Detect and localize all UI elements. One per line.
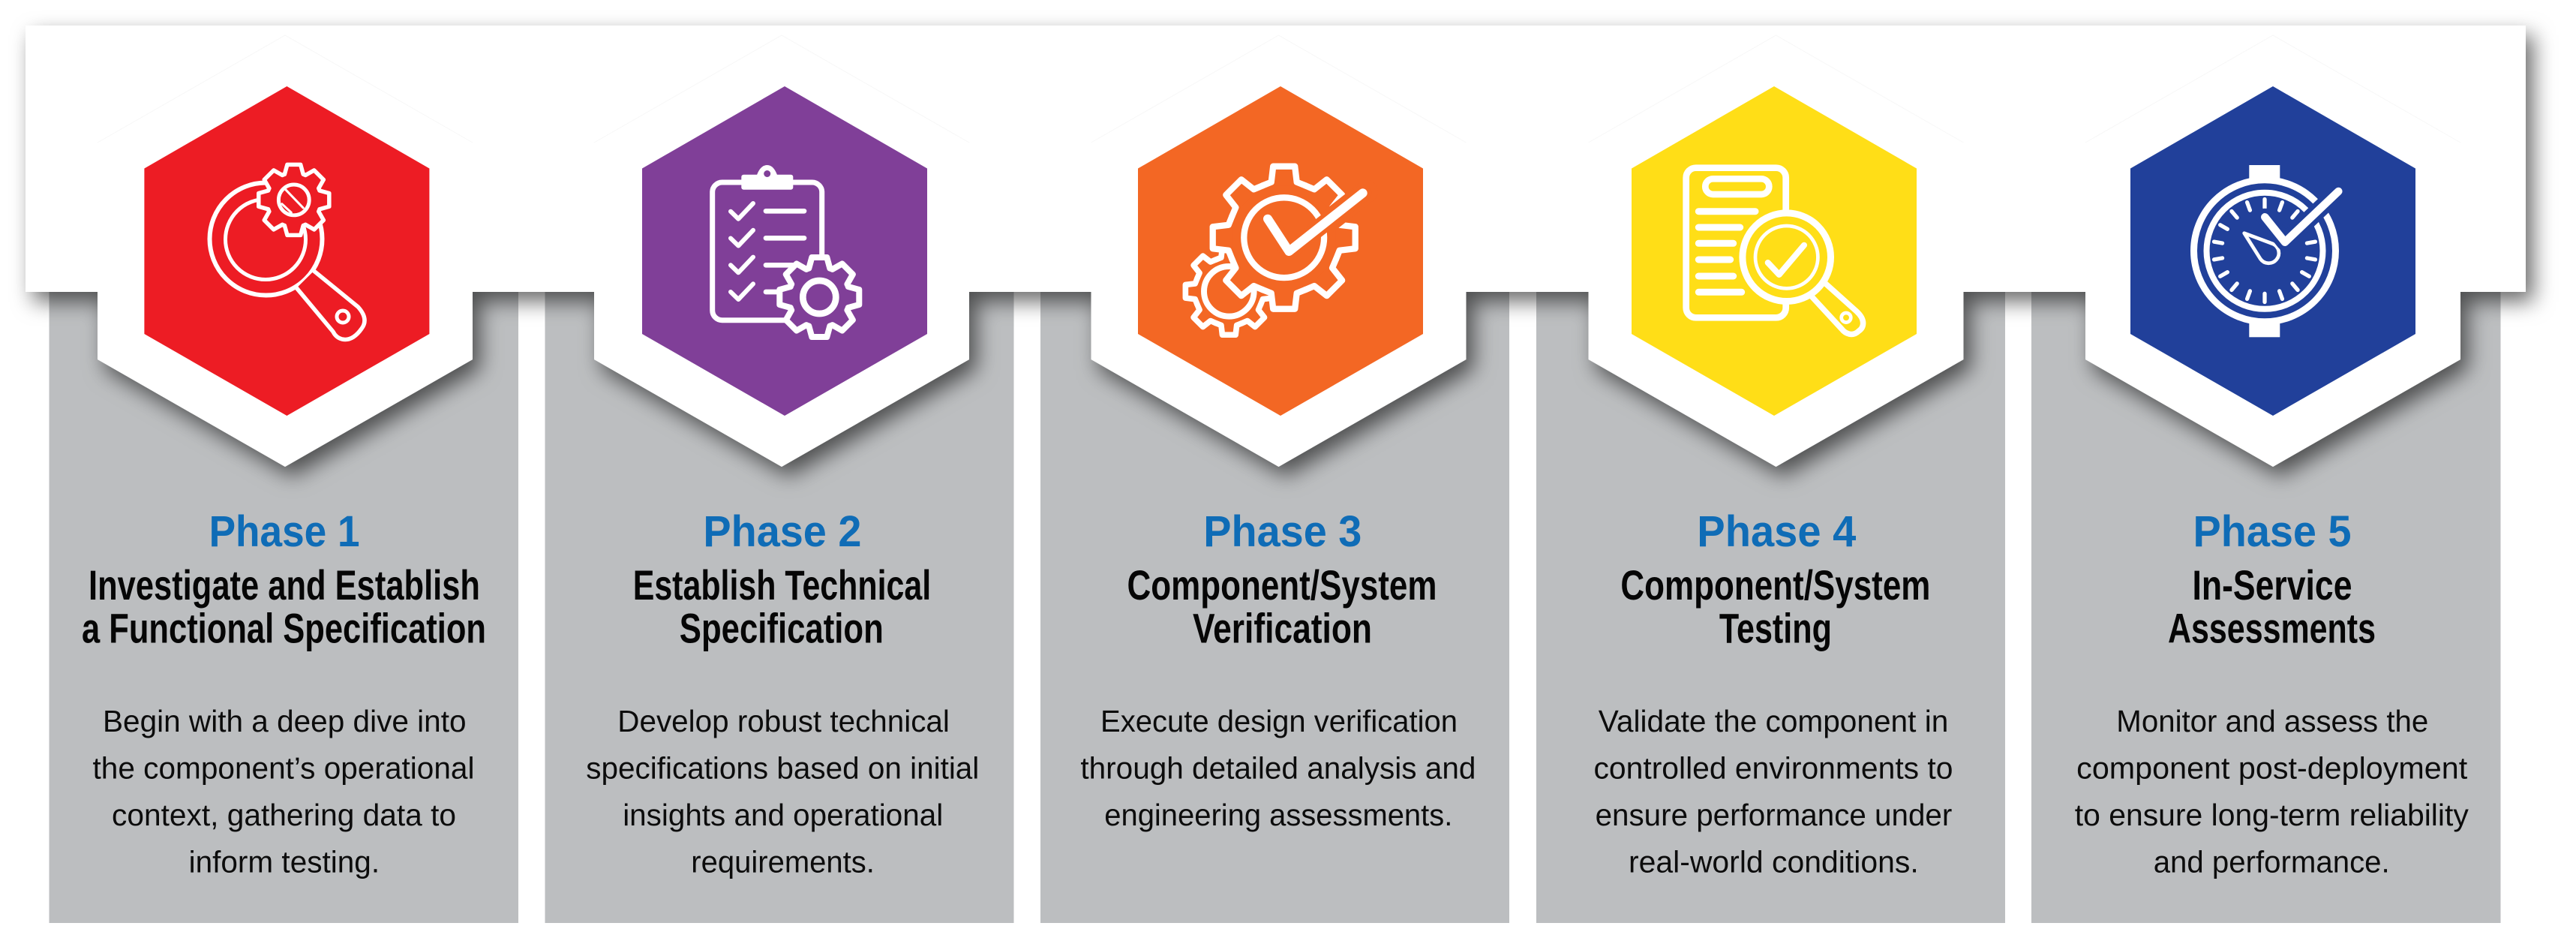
phase 4 title: Testing: [1719, 605, 1832, 652]
phase 1 description: inform testing.: [189, 845, 380, 879]
phase 1 text block: [82, 507, 486, 879]
phase 3 title: Component/System: [1127, 561, 1437, 609]
icon: magnifying glass with gear: [210, 164, 365, 339]
phase 2 description: Develop robust technical: [617, 704, 950, 738]
phase 5 description: [2075, 704, 2469, 879]
phase 2 badge: purple hexagon: [642, 86, 927, 416]
phase 5 description: and performance.: [2154, 845, 2390, 879]
phase 2 description: insights and operational: [623, 798, 943, 832]
phase 1 heading: Phase 1: [209, 507, 360, 556]
icon: clipboard checklist with gear: [713, 165, 859, 337]
phase 3 badge: orange hexagon: [1138, 86, 1423, 416]
phase 3 heading: Phase 3: [1203, 507, 1362, 556]
phase 4 text block: [1593, 507, 1953, 879]
phase 2 description: [586, 704, 979, 879]
panel: phase 2 background: [545, 225, 1014, 923]
phase 5 badge: blue hexagon: [2130, 86, 2415, 416]
phase 2 text block: [586, 507, 979, 879]
phase 5 title: In-Service: [2192, 561, 2352, 609]
phase 3 title: [1127, 561, 1437, 652]
phase 3 description: [1080, 704, 1476, 832]
phase 4 heading: Phase 4: [1697, 507, 1856, 556]
phase 4 description: controlled environments to: [1593, 751, 1953, 786]
panel: phase 1 background: [50, 225, 518, 923]
phase 1 description: Begin with a deep dive into: [103, 704, 467, 738]
icon: document with magnifier and check: [1686, 168, 1863, 334]
icon: two gears with check mark: [1185, 167, 1367, 335]
phase 1 title: Investigate and Establish: [89, 561, 480, 609]
panel: phase 5 background: [2031, 225, 2501, 923]
phase 2 description: specifications based on initial: [586, 751, 979, 786]
panel: phase 4 background: [1536, 225, 2005, 923]
phase 4 description: Validate the component in: [1599, 704, 1948, 738]
phase 5 heading: Phase 5: [2193, 507, 2351, 556]
phase 3 title: Verification: [1193, 605, 1372, 652]
phase 3 description: through detailed analysis and: [1080, 751, 1476, 786]
phase 5 description: component post-deployment: [2076, 751, 2468, 786]
phase 1 title: [82, 561, 486, 652]
phase 4 title: [1620, 561, 1930, 652]
phase 3 description: Execute design verification: [1100, 704, 1458, 738]
phase 1 badge: red hexagon: [144, 86, 429, 416]
phase 4 description: ensure performance under: [1596, 798, 1952, 832]
panel: phase 3 background: [1040, 225, 1509, 923]
phase 5 text block: [2075, 507, 2469, 879]
phase 1 description: the component’s operational: [93, 751, 474, 786]
phase 3 text block: [1080, 507, 1476, 832]
white header band with hexagon tabs: [26, 26, 2526, 467]
phase 2 heading: Phase 2: [703, 507, 861, 556]
phase 1 title: a Functional Specification: [82, 605, 486, 652]
phase 4 badge: yellow hexagon: [1632, 86, 1917, 416]
phase 1 description: context, gathering data to: [112, 798, 456, 832]
phase 5 title: [2168, 561, 2376, 652]
phase 2 title: Establish Technical: [633, 561, 931, 609]
phase 2 description: requirements.: [691, 845, 875, 879]
phase 5 description: Monitor and assess the: [2116, 704, 2428, 738]
phase 3 description: engineering assessments.: [1104, 798, 1452, 832]
phase 5 title: Assessments: [2168, 605, 2376, 652]
phase 1 description: [93, 704, 474, 879]
icon: stopwatch with check mark: [2193, 165, 2338, 337]
phase 4 description: real-world conditions.: [1629, 845, 1919, 879]
phase 5 description: to ensure long-term reliability: [2075, 798, 2469, 832]
phase 2 title: [633, 561, 931, 652]
phase 4 title: Component/System: [1620, 561, 1930, 609]
phase 4 description: [1593, 704, 1953, 879]
phase 2 title: Specification: [680, 605, 884, 652]
